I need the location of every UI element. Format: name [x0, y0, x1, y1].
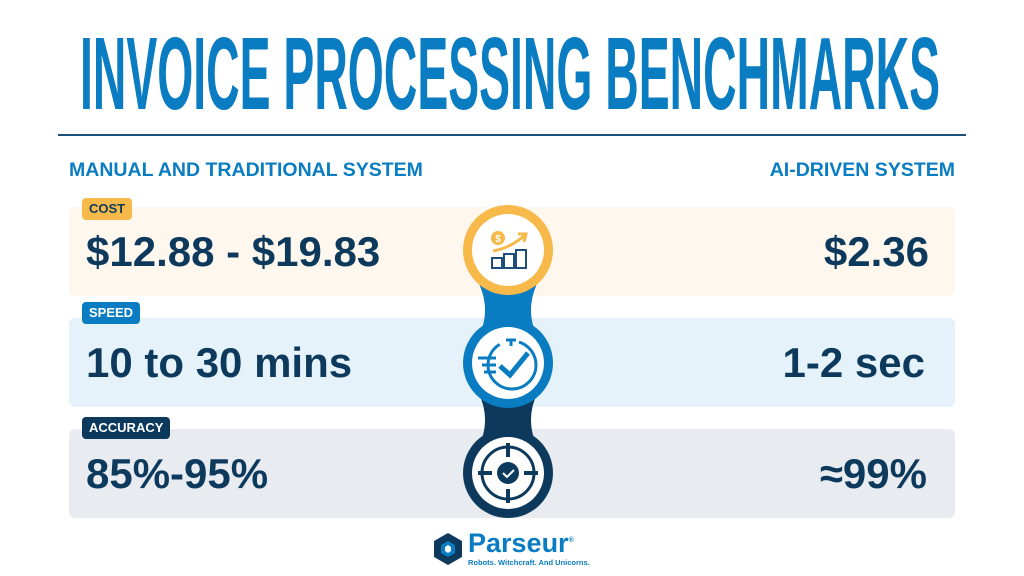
row: cost: $12.88 - $19.83	[86, 228, 380, 275]
icon: cost	[463, 205, 553, 295]
tag: speed: SPEED	[89, 305, 133, 320]
row: speed: 10 to 30 mins	[86, 339, 352, 386]
heading: ai: AI-DRIVEN SYSTEM	[770, 159, 955, 181]
heading: manual: MANUAL AND TRADITIONAL SYSTEM	[69, 159, 423, 181]
tag: accuracy	[82, 417, 170, 439]
tag: cost: COST	[89, 201, 125, 216]
row: accuracy: 85%-95%	[86, 450, 268, 497]
icon: accuracy	[463, 428, 553, 518]
row: cost: $2.36	[824, 228, 929, 275]
icon: speed	[463, 318, 553, 408]
tag: cost	[82, 198, 132, 220]
icon: cost: $	[495, 234, 501, 245]
tag: speed	[82, 302, 140, 324]
tag: accuracy: ACCURACY	[89, 420, 163, 435]
row: cost	[69, 207, 955, 296]
row: accuracy	[69, 429, 955, 518]
logo: Robots. Witchcraft. And Unicorns.	[468, 558, 590, 567]
row: accuracy: ≈99%	[820, 450, 927, 497]
row: speed	[69, 318, 955, 407]
row: speed: 1-2 sec	[783, 339, 925, 386]
logo: Parseur®	[468, 528, 574, 558]
icon chain	[463, 205, 553, 518]
logo	[434, 528, 590, 567]
